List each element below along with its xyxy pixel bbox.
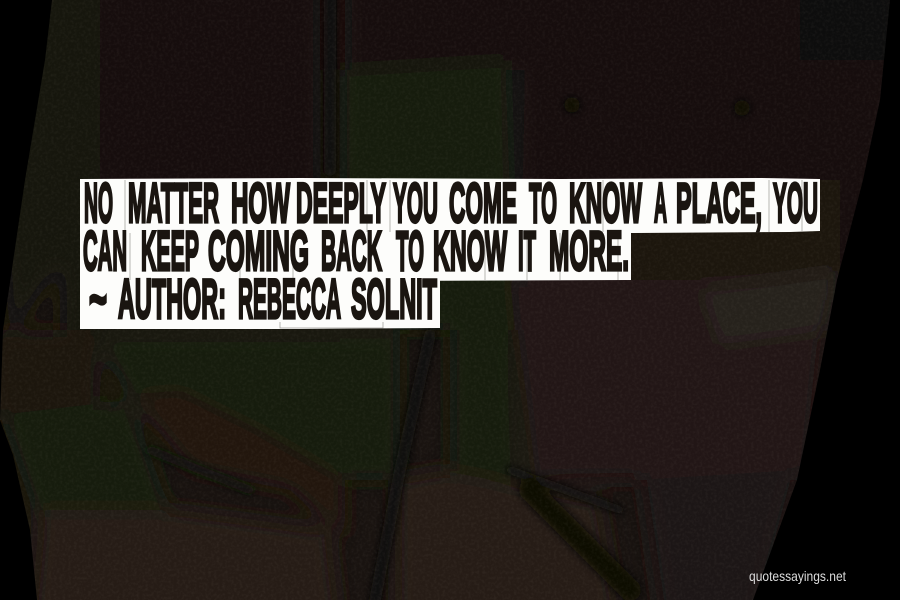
quote line 2: TO <box>396 219 424 282</box>
quote line 1: TO <box>529 171 557 234</box>
watermark: quotessayings.net <box>749 568 846 584</box>
quote line 2: CAN <box>83 219 127 282</box>
quote line 2: IT <box>518 219 536 282</box>
author line: AUTHOR: <box>118 267 226 330</box>
author line: REBECCA <box>238 267 341 330</box>
strip: line 2 <box>80 232 631 281</box>
quote line 1: MATTER <box>128 171 219 234</box>
quote line 1: PLACE, <box>676 171 762 234</box>
quote line 1: DEEPLY <box>296 171 386 234</box>
quote line 1 <box>84 171 818 234</box>
quote line 1: A <box>654 171 667 234</box>
quote line 1: HOW <box>231 171 290 234</box>
text: YOU <box>773 171 818 234</box>
strip: line 1 <box>80 178 820 233</box>
quote paper strips: MORE. <box>549 219 629 282</box>
quote line 1: NO <box>84 171 113 234</box>
quote paper strips <box>80 171 820 330</box>
quote line 2: BACK <box>321 219 382 282</box>
quote line 1: COME <box>449 171 517 234</box>
black surround right of leaf <box>753 0 900 600</box>
strip cell edges <box>125 180 802 328</box>
quote paper strips: SOLNIT <box>351 267 437 330</box>
quote line 2: COMING <box>208 219 309 282</box>
quote line 2: KNOW <box>433 219 507 282</box>
quote line 1: KNOW <box>569 171 642 234</box>
black surround left of leaf <box>0 0 52 600</box>
quote line 2 <box>83 219 629 282</box>
strip: line 3 <box>80 280 440 329</box>
quote line 1: YOU <box>393 171 438 234</box>
author line: ~ <box>89 267 107 330</box>
quote line 2: KEEP <box>141 219 199 282</box>
